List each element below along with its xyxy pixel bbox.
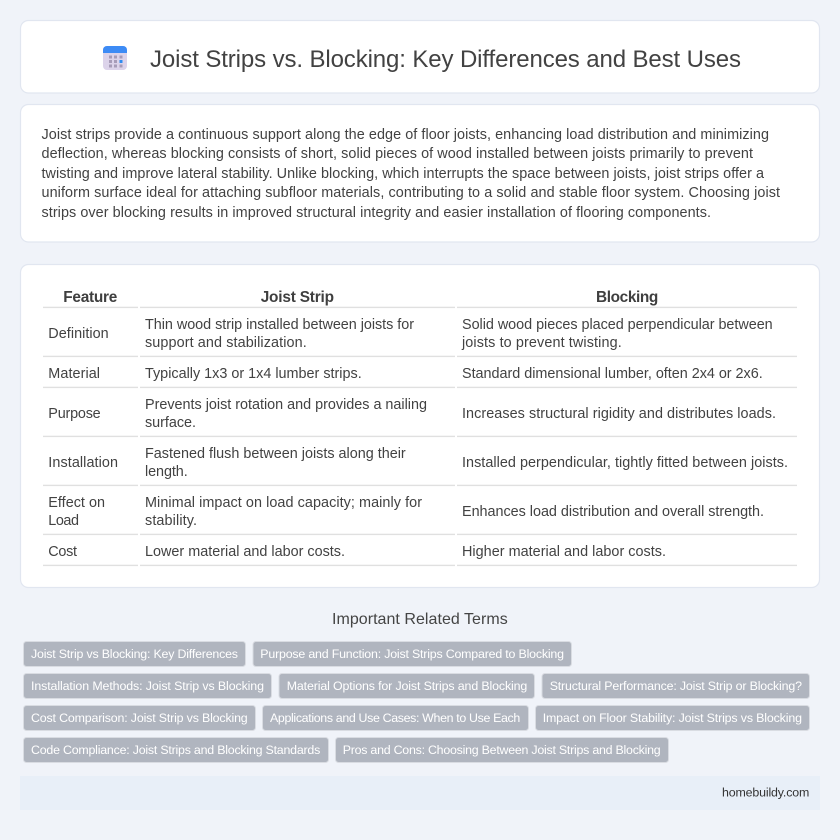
- tag: Pros and Cons: Choosing Between Joist Strips and Blocking: [343, 743, 661, 757]
- panel: comparison table: [20, 264, 820, 588]
- panel: summary paragraph: [20, 104, 820, 242]
- row: definition: joists to prevent twisting.: [461, 335, 622, 351]
- row: installation: Fastened flush between joists along their: [145, 446, 406, 462]
- tag: Material Options for Joist Strips and Blocking: [287, 679, 527, 693]
- tag: Applications and Use Cases: When to Use Each: [270, 711, 520, 725]
- row: installation: Installed perpendicular, tightly fitted between joists.: [462, 455, 788, 471]
- tag: [24, 706, 256, 730]
- row: installation: length.: [145, 464, 188, 480]
- tag: [536, 706, 810, 730]
- tag: [542, 674, 810, 698]
- row: purpose: [48, 397, 776, 431]
- tag: Code Compliance: Joist Strips and Blocking Standards: [31, 743, 320, 757]
- tag: [24, 738, 328, 762]
- row: effect on load: [48, 495, 764, 529]
- tag: [279, 674, 534, 698]
- row: purpose: Purpose: [48, 406, 101, 422]
- table header row: Joist Strip: [261, 289, 334, 306]
- tag: [336, 738, 668, 762]
- row: effect on load: Effect on: [48, 495, 105, 511]
- tag: [24, 642, 246, 666]
- tag cloud: related terms: [24, 642, 810, 762]
- row: purpose: Increases structural rigidity and distributes loads.: [462, 406, 776, 422]
- row: effect on load: Load: [48, 513, 79, 529]
- row: purpose: surface.: [145, 415, 196, 431]
- table header row: [63, 289, 658, 306]
- table header row: Feature: [63, 289, 118, 306]
- row: material: Standard dimensional lumber, often 2x4 or 2x6.: [462, 366, 763, 382]
- row: material: Material: [48, 366, 100, 382]
- tag: Impact on Floor Stability: Joist Strips vs Blocking: [543, 711, 802, 725]
- row: cost: Lower material and labor costs.: [145, 544, 345, 560]
- row: definition: Thin wood strip installed between joists for: [145, 317, 414, 333]
- row: definition: support and stabilization.: [145, 335, 307, 351]
- footer: [20, 776, 820, 810]
- text block: summary: [42, 127, 780, 221]
- text block: summary: uniform surface ideal for attaching subfloor materials, contributing to a solid and stable floor system. Choosing joist: [42, 185, 780, 201]
- row: material: [48, 366, 763, 382]
- icon: calendar: [103, 46, 127, 70]
- title: Joist Strips vs. Blocking: Key Differences and Best Uses: [150, 46, 741, 73]
- footer: homebuildy.com: [722, 786, 809, 800]
- tag: Installation Methods: Joist Strip vs Blocking: [31, 679, 264, 693]
- tag: Purpose and Function: Joist Strips Compared to Blocking: [260, 647, 564, 661]
- row: effect on load: stability.: [145, 513, 197, 529]
- text block: summary: deflection, whereas blocking consists of short, solid pieces of wood installed between joists primarily to prevent: [42, 146, 753, 162]
- panel: header: [20, 20, 820, 93]
- row: installation: [48, 446, 788, 480]
- tag: Cost Comparison: Joist Strip vs Blocking: [31, 711, 248, 725]
- row: purpose: Prevents joist rotation and provides a nailing: [145, 397, 427, 413]
- text block: summary: twisting and improve lateral stability. Unlike blocking, which interrupts the space between joists, joist strips offer a: [42, 166, 764, 182]
- row: definition: [48, 317, 773, 351]
- row: definition: Definition: [48, 326, 109, 342]
- row: material: Typically 1x3 or 1x4 lumber strips.: [145, 366, 362, 382]
- row: cost: Cost: [48, 544, 77, 560]
- row: cost: Higher material and labor costs.: [462, 544, 666, 560]
- row: effect on load: Enhances load distribution and overall strength.: [462, 504, 764, 520]
- tag: Joist Strip vs Blocking: Key Differences: [31, 647, 238, 661]
- table header row: Blocking: [596, 289, 658, 306]
- text block: summary: strips over blocking results in improved structural integrity and easier installation of flooring components.: [42, 205, 711, 221]
- tag: [262, 706, 528, 730]
- row: installation: Installation: [48, 455, 118, 471]
- text block: summary: Joist strips provide a continuous support along the edge of floor joists, enhancing load distribution and minimizing: [42, 127, 769, 143]
- row: cost: [48, 544, 666, 560]
- row: effect on load: Minimal impact on load capacity; mainly for: [145, 495, 422, 511]
- row: definition: Solid wood pieces placed perpendicular between: [462, 317, 773, 333]
- tag: [253, 642, 572, 666]
- heading: important related terms: Important Related Terms: [332, 611, 508, 628]
- tag: Structural Performance: Joist Strip or Blocking?: [550, 679, 802, 693]
- tag: [24, 674, 272, 698]
